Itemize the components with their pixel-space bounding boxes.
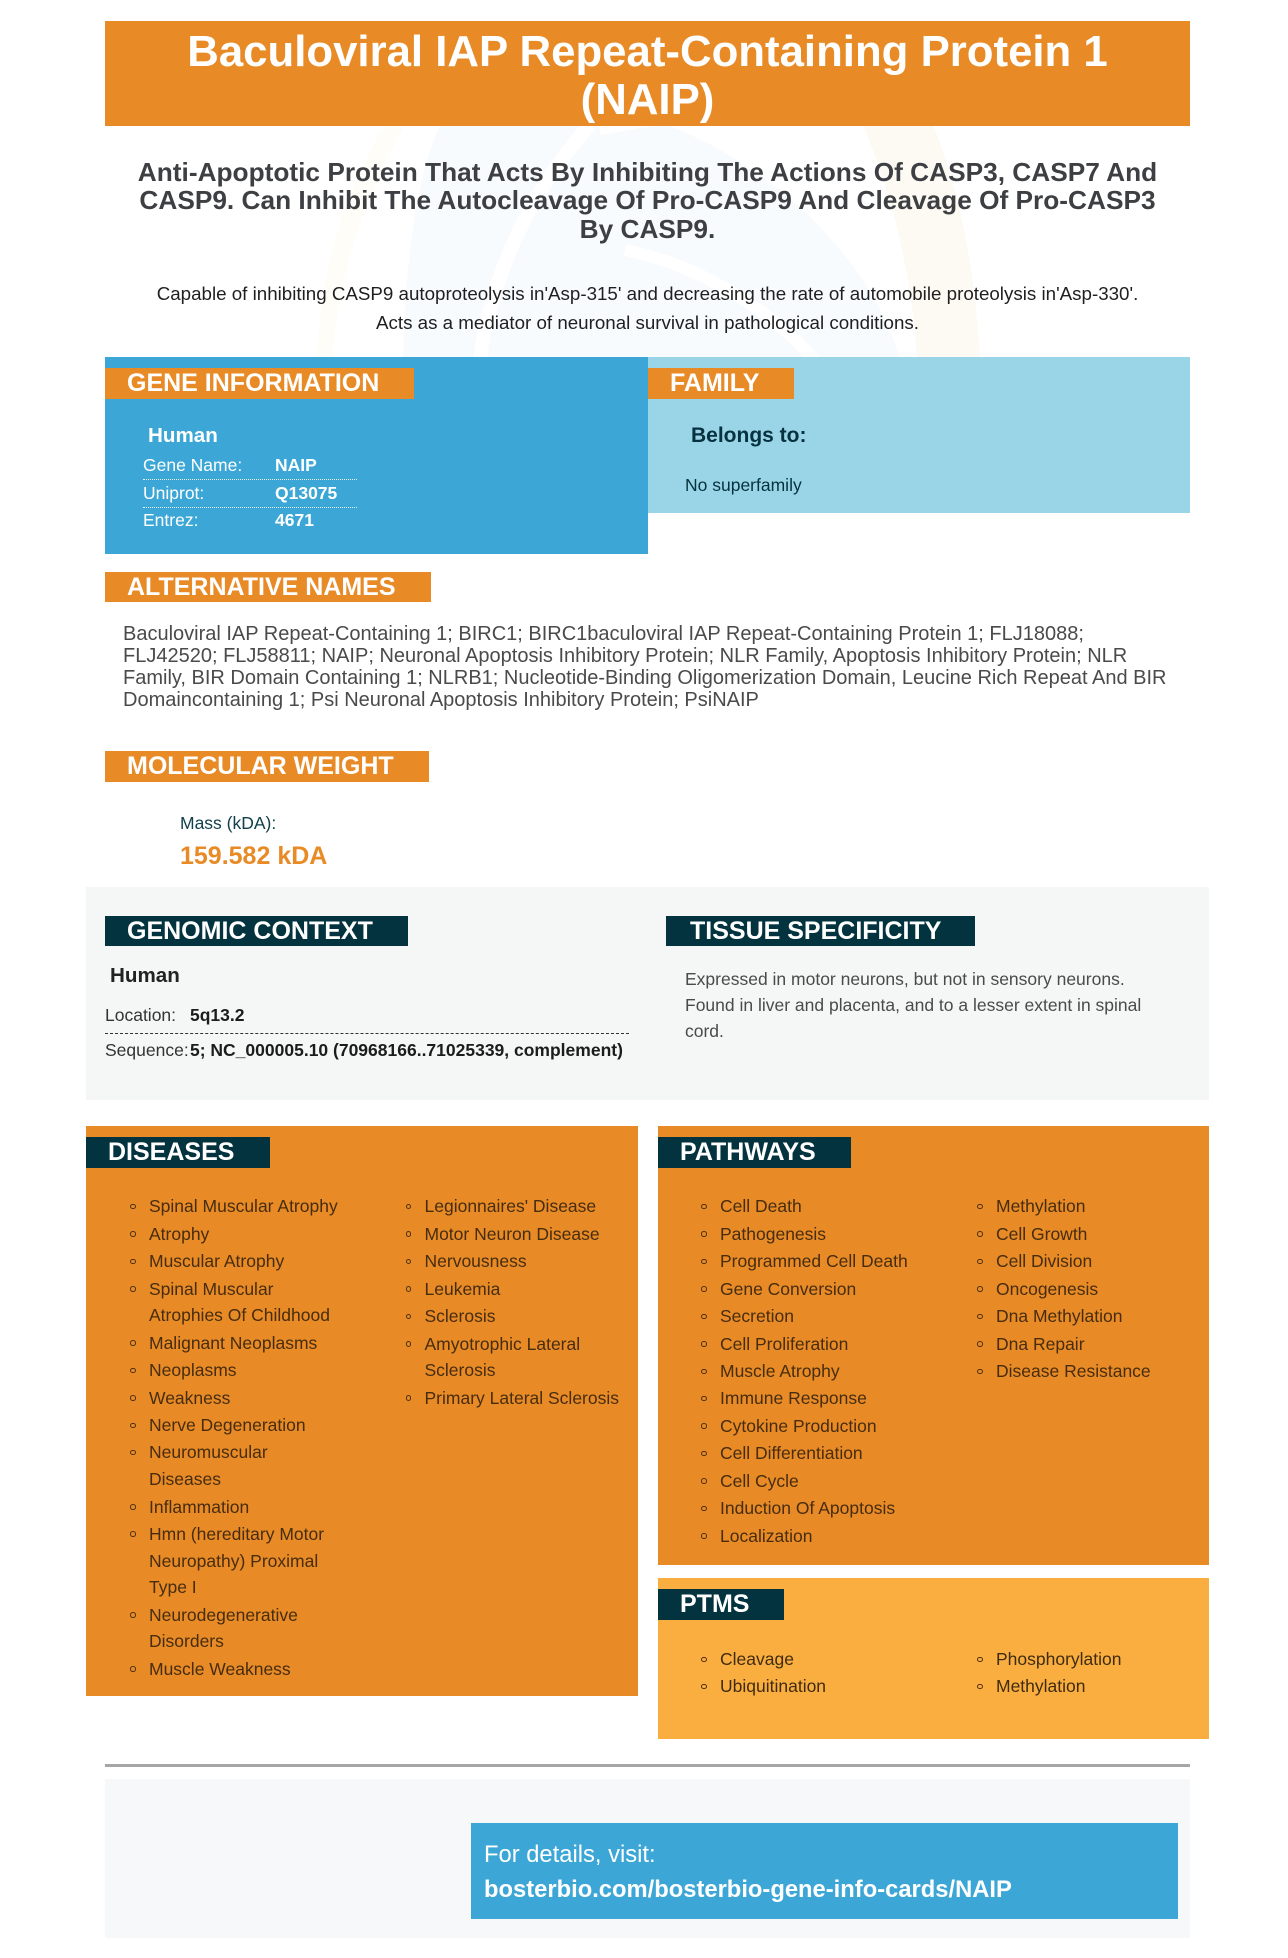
heading: alternative names: ALTERNATIVE NAMES <box>127 573 396 601</box>
diseases list column 2 <box>406 1196 619 1408</box>
pathways list column 1: Programmed Cell Death <box>720 1251 908 1271</box>
diseases list column 1: Spinal Muscular Atrophy <box>149 1196 338 1216</box>
pathways list column 1: Immune Response <box>720 1388 867 1408</box>
heading: pathways <box>658 1137 851 1168</box>
diseases list column 2: Sclerosis <box>424 1306 496 1326</box>
pathways list column 2: Cell Growth <box>996 1224 1087 1244</box>
ptms list column 2: Phosphorylation <box>996 1649 1122 1669</box>
diseases list column 1: Type I <box>149 1577 197 1597</box>
uniprot row <box>143 480 357 508</box>
panel: footer <box>105 1779 1190 1938</box>
diseases list column 1: Muscle Weakness <box>149 1659 291 1679</box>
pathways list column 1: Localization <box>720 1526 812 1546</box>
panel: pathways <box>658 1126 1209 1565</box>
ptms list column 1: Ubiquitination <box>720 1676 826 1696</box>
pathways list column 2: Methylation <box>996 1196 1086 1216</box>
diseases list column 1: Disorders <box>149 1631 224 1651</box>
diseases list column 1: Muscular Atrophy <box>149 1251 284 1271</box>
panel: family <box>648 357 1190 513</box>
alternative names text: FLJ42520; FLJ58811; NAIP; Neuronal Apoptosis Inhibitory Protein; NLR Family, Apoptosis Inhibitory Protein; NLR <box>123 645 1127 667</box>
diseases list column 1: Neuromuscular <box>149 1442 268 1462</box>
panel: gene information <box>105 357 648 554</box>
diseases list column 2: Legionnaires' Disease <box>424 1196 596 1216</box>
species: Human <box>148 424 218 447</box>
panel: ptms <box>658 1578 1209 1739</box>
pathways list column 2: Dna Repair <box>996 1334 1085 1354</box>
mass value: 159.582 kDA <box>180 842 327 870</box>
pathways list column 2: Dna Methylation <box>996 1306 1122 1326</box>
pathways list column 1: Cell Cycle <box>720 1471 799 1491</box>
ptms list column 2 <box>977 1649 1122 1696</box>
diseases list column 1: Hmn (hereditary Motor <box>149 1524 324 1544</box>
heading: molecular weight: MOLECULAR WEIGHT <box>127 752 394 780</box>
diseases list column 2: Sclerosis <box>424 1360 496 1380</box>
diseases list column 2: Amyotrophic Lateral <box>424 1334 580 1354</box>
tissue text <box>685 969 1141 1041</box>
heading: diseases <box>86 1137 270 1168</box>
location value: 5q13.2 <box>190 1005 244 1025</box>
diseases list column 1: Weakness <box>149 1388 230 1408</box>
uniprot row: Q13075 <box>275 483 337 503</box>
heading: ptms: PTMS <box>680 1590 749 1618</box>
diseases list column 1: Neoplasms <box>149 1360 237 1380</box>
dashed separator <box>105 1033 629 1034</box>
location: Location: <box>105 1005 176 1025</box>
pathways list column 2: Disease Resistance <box>996 1361 1151 1381</box>
diseases list column 2: Primary Lateral Sclerosis <box>424 1388 619 1408</box>
pathways list column 1: Muscle Atrophy <box>720 1361 840 1381</box>
pathways list column 2: Oncogenesis <box>996 1279 1098 1299</box>
heading: ptms <box>658 1589 784 1620</box>
description: Capable of inhibiting CASP9 autoproteolysis in'Asp-315' and decreasing the rate of automobile proteolysis in'Asp-330'. <box>157 283 1138 304</box>
diseases list column 2: Nervousness <box>424 1251 527 1271</box>
pathways list column 1 <box>701 1196 908 1546</box>
pathways list column 2: Cell Division <box>996 1251 1092 1271</box>
title banner: Baculoviral IAP Repeat-Containing Protein 1 <box>187 27 1108 76</box>
diseases list column 2: Leukemia <box>424 1279 500 1299</box>
heading: pathways: PATHWAYS <box>680 1138 816 1166</box>
diseases list column 1: Neuropathy) Proximal <box>149 1551 318 1571</box>
belongs to: Belongs to: <box>691 424 806 447</box>
alternative names text: Family, BIR Domain Containing 1; NLRB1; Nucleotide-Binding Oligomerization Domain, Leucine Rich Repeat And BIR <box>123 667 1166 689</box>
entrez row: Entrez: <box>143 510 198 530</box>
alternative names text: Baculoviral IAP Repeat-Containing 1; BIRC1; BIRC1baculoviral IAP Repeat-Containing Protein 1; FLJ18088; <box>123 623 1084 645</box>
diseases list column 1: Spinal Muscular <box>149 1279 274 1299</box>
heading: family <box>648 368 794 399</box>
callout: details link <box>471 1823 1178 1919</box>
tissue text: Found in liver and placenta, and to a lesser extent in spinal <box>685 995 1141 1015</box>
subtitle: CASP9. Can Inhibit The Autocleavage Of Pro-CASP9 And Cleavage Of Pro-CASP3 <box>139 185 1156 215</box>
heading: gene information: GENE INFORMATION <box>127 369 379 397</box>
heading: tissue specificity: TISSUE SPECIFICITY <box>690 917 941 945</box>
diseases list column 1: Atrophy <box>149 1224 209 1244</box>
uniprot row: Uniprot: <box>143 483 204 503</box>
panel: genomic context and tissue specificity <box>86 887 1209 1100</box>
species: Human <box>110 964 180 987</box>
diseases list column 1: Inflammation <box>149 1497 249 1517</box>
diseases list column 1: Malignant Neoplasms <box>149 1333 317 1353</box>
diseases list column 1 <box>130 1196 338 1679</box>
alternative names text: Domaincontaining 1; Psi Neuronal Apoptosis Inhibitory Protein; PsiNAIP <box>123 689 759 711</box>
pathways list column 1: Pathogenesis <box>720 1224 826 1244</box>
family value: No superfamily <box>685 475 802 495</box>
mass label: Mass (kDA): <box>180 813 276 833</box>
diseases list column 1: Diseases <box>149 1469 221 1489</box>
subtitle: Anti-Apoptotic Protein That Acts By Inhibiting The Actions Of CASP3, CASP7 And <box>138 157 1157 187</box>
title banner: (NAIP) <box>581 74 714 124</box>
entrez row <box>143 510 314 530</box>
diseases list column 2: Motor Neuron Disease <box>424 1224 600 1244</box>
callout url: bosterbio.com/bosterbio-gene-info-cards/NAIP <box>484 1876 1012 1903</box>
pathways list column 1: Induction Of Apoptosis <box>720 1498 895 1518</box>
gene name row <box>143 453 357 480</box>
sequence value: 5; NC_000005.10 (70968166..71025339, complement) <box>190 1040 623 1060</box>
pathways list column 1: Cell Death <box>720 1196 802 1216</box>
subtitle <box>138 157 1157 244</box>
pathways list column 1: Secretion <box>720 1306 794 1326</box>
gene name row: NAIP <box>275 455 317 475</box>
sequence: Sequence: <box>105 1040 189 1060</box>
tissue text: Expressed in motor neurons, but not in sensory neurons. <box>685 969 1125 989</box>
ptms list column 1 <box>701 1649 826 1696</box>
diseases list column 1: Nerve Degeneration <box>149 1415 306 1435</box>
ptms list column 2: Methylation <box>996 1676 1086 1696</box>
pathways list column 1: Cytokine Production <box>720 1416 877 1436</box>
callout label: For details, visit: <box>484 1841 656 1868</box>
pathways list column 1: Cell Differentiation <box>720 1443 863 1463</box>
watermark logo <box>864 126 980 357</box>
description: Acts as a mediator of neuronal survival in pathological conditions. <box>376 312 919 333</box>
heading: diseases: DISEASES <box>108 1138 234 1166</box>
gene name row: Gene Name: <box>143 455 242 475</box>
description <box>157 283 1138 333</box>
diseases list column 1: Neurodegenerative <box>149 1605 298 1625</box>
panel: diseases <box>86 1126 638 1696</box>
pathways list column 2 <box>977 1196 1151 1381</box>
title banner <box>105 21 1190 126</box>
ptms list column 1: Cleavage <box>720 1649 794 1669</box>
subtitle: By CASP9. <box>580 214 715 244</box>
pathways list column 1: Cell Proliferation <box>720 1334 848 1354</box>
tissue text: cord. <box>685 1021 724 1041</box>
diseases list column 1: Atrophies Of Childhood <box>149 1305 330 1325</box>
pathways list column 1: Gene Conversion <box>720 1279 856 1299</box>
entrez row: 4671 <box>275 510 314 530</box>
heading: family: FAMILY <box>670 369 759 397</box>
alternative names text <box>123 623 1166 711</box>
heading: genomic context: GENOMIC CONTEXT <box>127 917 373 945</box>
